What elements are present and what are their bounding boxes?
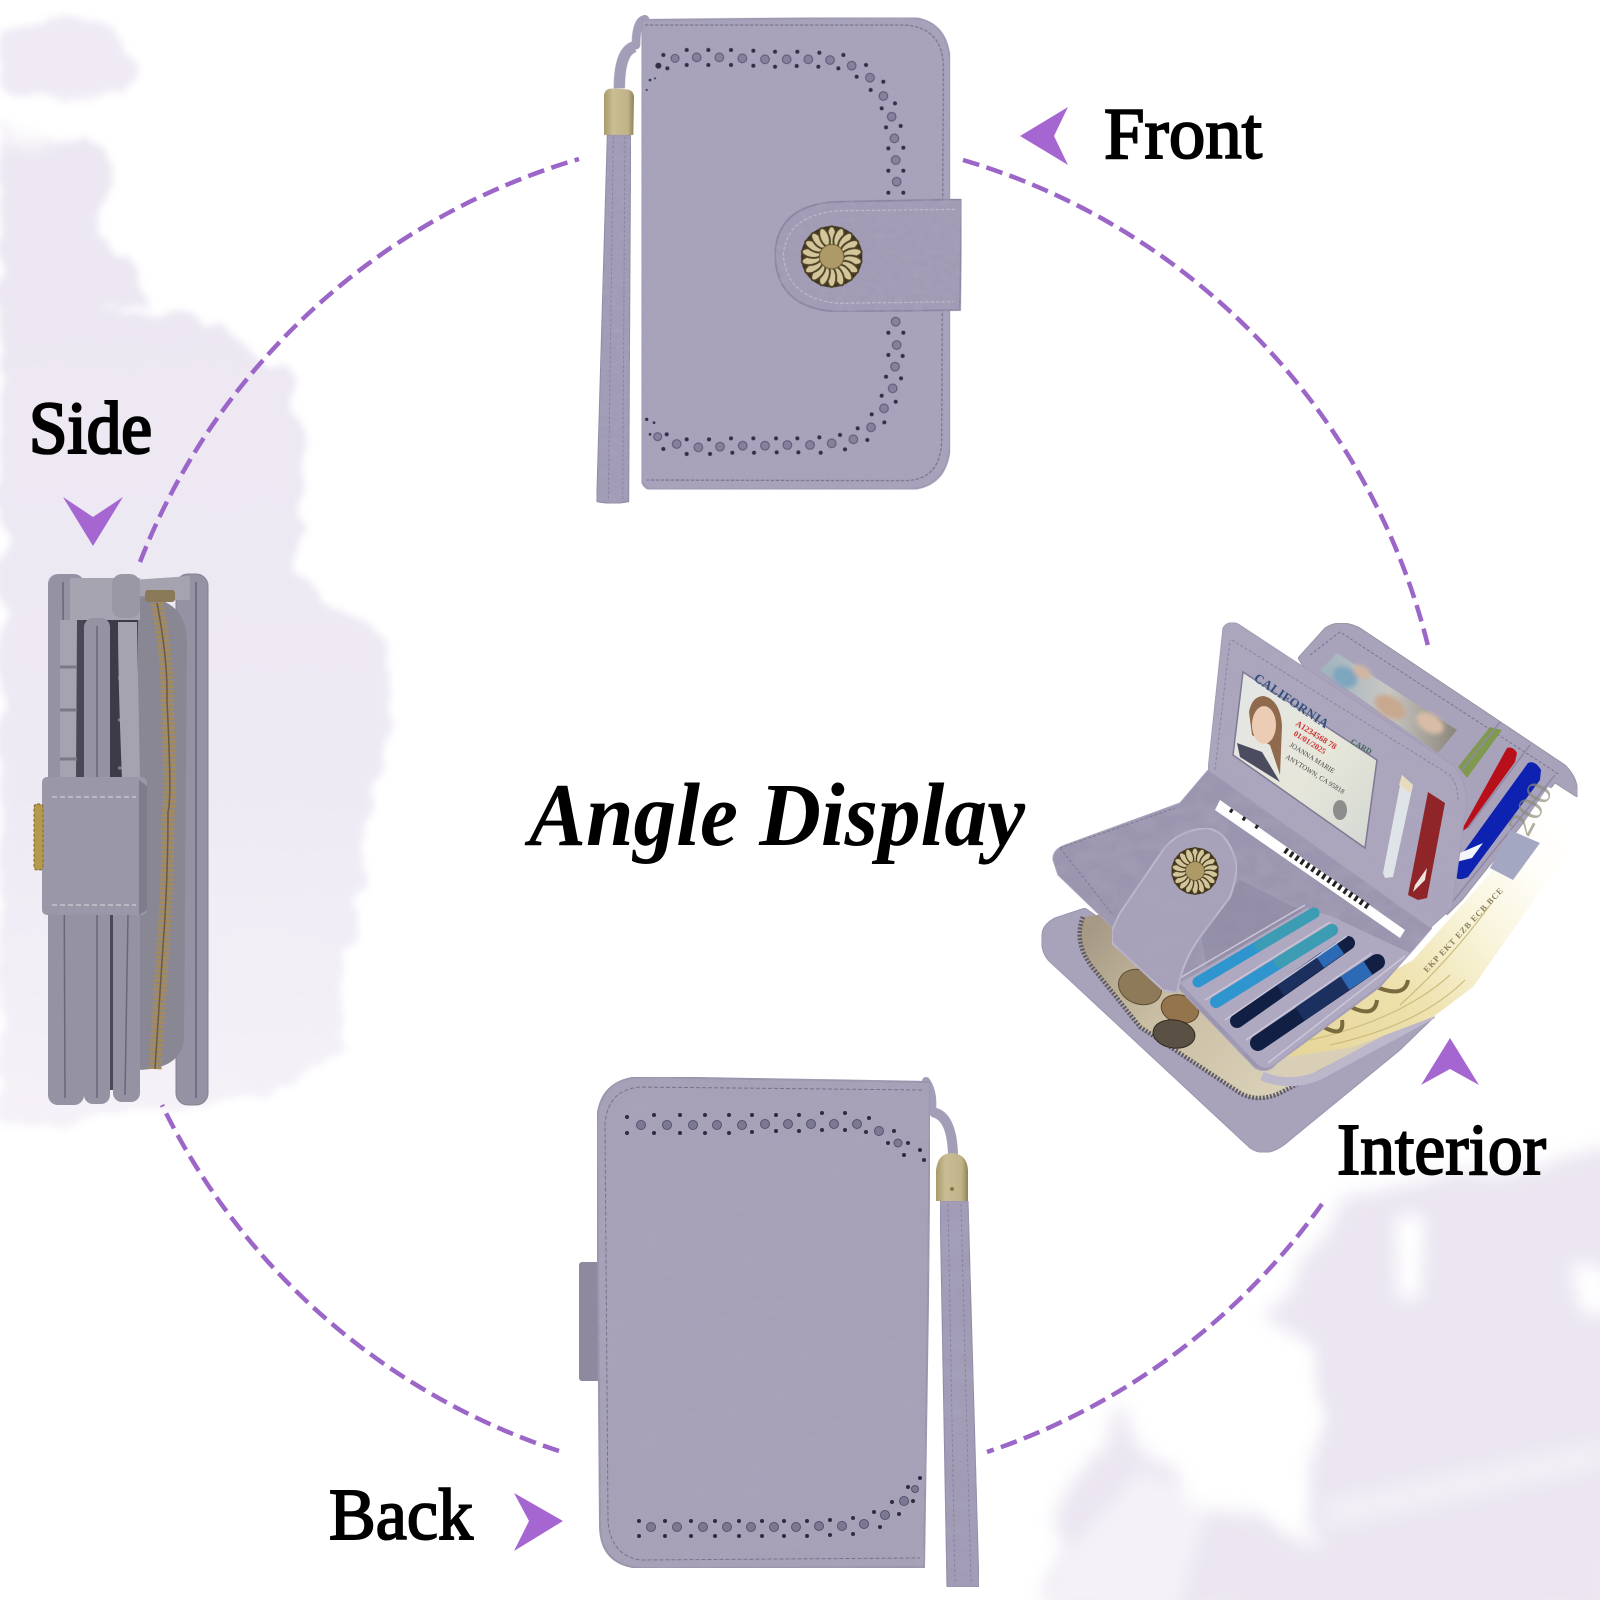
brass zipper	[145, 590, 175, 1069]
ID card window: JOANNA MARIE	[1288, 741, 1336, 775]
arrow: back	[514, 1493, 563, 1551]
arrow: side	[63, 497, 123, 546]
wrist strap	[926, 1081, 979, 1587]
ID card window: 01/01/2025	[1292, 729, 1328, 756]
wallet: open interior view	[1042, 623, 1585, 1152]
euro banknotes	[1283, 775, 1585, 1058]
wallet: front view	[597, 17, 962, 503]
brogue perforations	[645, 48, 905, 456]
rear card slots	[1450, 722, 1555, 905]
wallet: back view	[579, 1077, 979, 1587]
arrow: interior	[1421, 1038, 1479, 1085]
white receipt strip	[1215, 800, 1405, 938]
daisy snap button	[801, 226, 862, 287]
ID card window	[1233, 670, 1377, 848]
daisy snap button	[1171, 848, 1219, 894]
cards in slots	[1198, 913, 1377, 1043]
side tab peek	[579, 1262, 601, 1381]
title: Angle Display: Angle Display	[524, 766, 1026, 865]
coins	[1114, 964, 1202, 1051]
dashed circular ring	[140, 159, 1429, 1452]
euro banknotes: 200	[1500, 775, 1560, 842]
card flap	[1053, 770, 1432, 1071]
rear panel with photo window	[1298, 623, 1578, 915]
snap tab	[775, 199, 962, 312]
label: Front: Front	[1104, 93, 1262, 174]
gold snap edge	[34, 804, 43, 870]
side tab	[42, 777, 147, 915]
wallet body	[597, 1077, 930, 1568]
euro banknotes: EKP EKT EZB ECB BCE	[1421, 885, 1505, 974]
ID window panel	[1208, 623, 1467, 928]
label: Back: Back	[329, 1474, 473, 1555]
ID card window: CARD	[1349, 737, 1374, 756]
ID card window: A1234568 78	[1294, 718, 1339, 751]
back panel	[176, 574, 208, 1105]
wrist strap	[597, 19, 645, 503]
ID card window: CALIFORNIA	[1251, 670, 1332, 731]
label: Interior: Interior	[1337, 1109, 1546, 1190]
panel slots: white and red cards	[1383, 775, 1445, 900]
zipper tape	[136, 596, 187, 1070]
wallet: side view	[34, 574, 208, 1105]
snap tab	[1112, 828, 1237, 993]
ID card window: ANYTOWN, CA 95818	[1284, 753, 1346, 796]
wallet body	[642, 17, 950, 489]
card slot panel	[1180, 908, 1410, 1068]
zippered lower pouch	[1042, 900, 1433, 1152]
left panels and gaps	[72, 616, 138, 916]
arrow: front	[1020, 107, 1068, 165]
brogue perforations	[625, 1111, 926, 1538]
label: Side: Side	[29, 388, 152, 470]
